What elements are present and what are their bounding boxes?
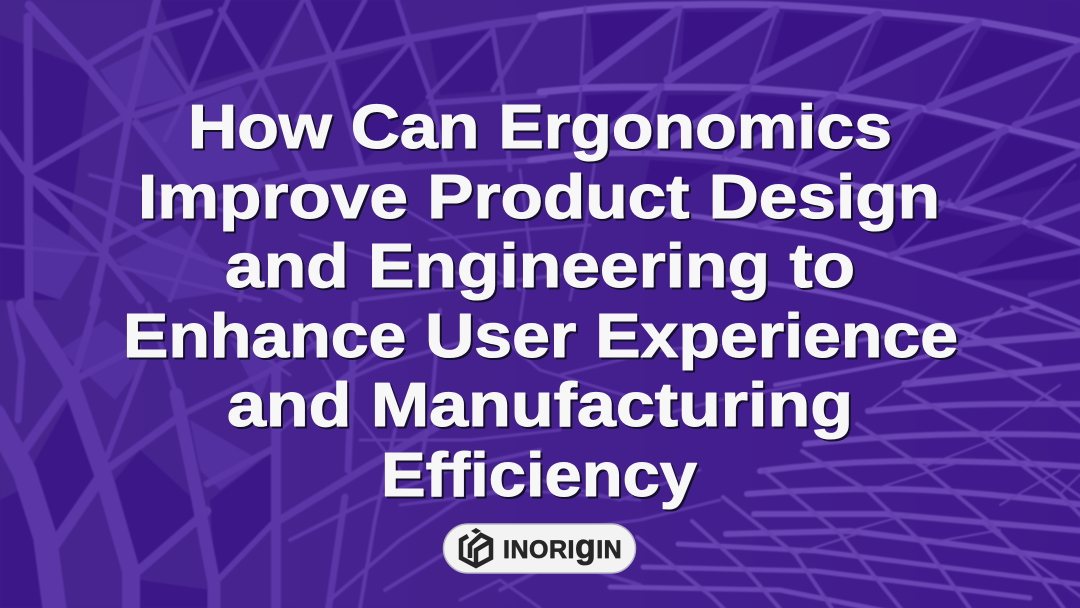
title line 2: Improve Product Design (138, 163, 940, 232)
perspective grid arcs, upper right (530, 4, 1080, 365)
badge pill (444, 524, 636, 573)
title (123, 93, 958, 510)
upper left lattice bars (0, 0, 545, 304)
shaded panels, left (0, 0, 500, 608)
perspective grid ribs, lower right (637, 307, 1080, 608)
title line 3: and Engineering to (225, 232, 855, 301)
title line 1: How Can Ergonomics (188, 93, 892, 162)
perspective grid ribs, upper right (574, 7, 1080, 295)
lighter panels, left (30, 45, 280, 490)
dense central lattice, lower middle (190, 160, 800, 608)
perspective grid bands, lower right (610, 305, 1080, 608)
title line 4: Enhance User Experience (123, 302, 958, 371)
logo wordmark: INORIgIN (503, 528, 622, 566)
title line 5: and Manufacturing (227, 371, 853, 440)
icon: inorigin hexagon cube (461, 528, 491, 566)
thick structural ribs, lower left (0, 300, 440, 608)
dark cells, upper right (585, 10, 1080, 280)
logo badge (444, 524, 636, 573)
title line 6: Efficiency (381, 441, 698, 510)
